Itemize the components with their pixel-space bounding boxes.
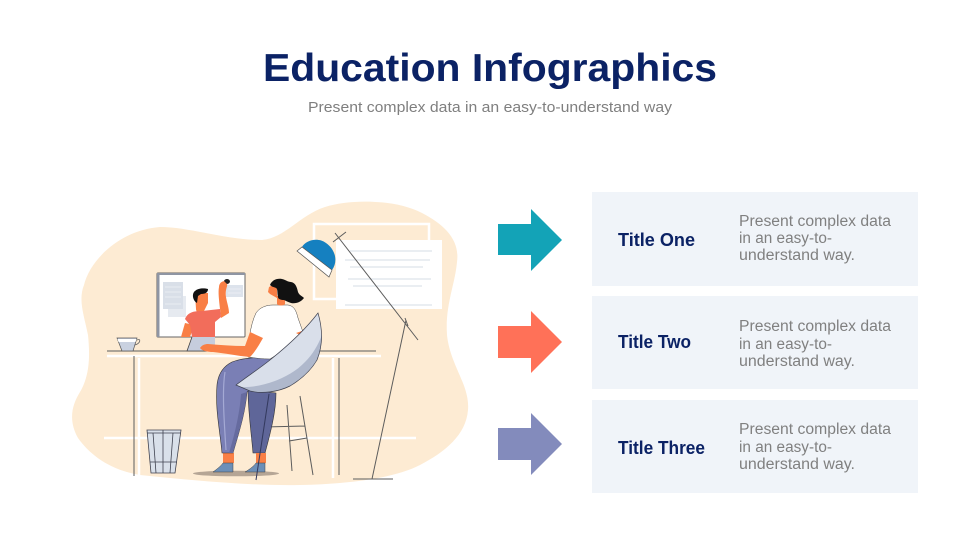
white shirt — [248, 305, 303, 359]
crescent chair — [236, 313, 322, 392]
illustration: person at desk on video call — [72, 202, 468, 485]
waste bin — [147, 430, 181, 473]
heading: title two: Title Two — [618, 332, 691, 352]
man raising arm — [181, 279, 230, 337]
wall note paper — [336, 240, 442, 309]
monitor with video call — [157, 273, 245, 337]
arm — [200, 332, 263, 357]
text: title two description: in an easy-to- — [739, 336, 832, 353]
floor lamp — [297, 232, 418, 479]
stool — [264, 396, 313, 475]
laptop — [187, 337, 218, 351]
subtitle: Present complex data in an easy-to-understand way — [308, 99, 673, 116]
wall picture frame — [314, 224, 429, 299]
face — [268, 283, 277, 298]
woman seated on chair — [200, 279, 304, 472]
background blob — [72, 202, 468, 485]
floor shadow — [193, 471, 279, 476]
text: title one description: Present complex data — [739, 213, 891, 230]
arrow: coral — [498, 311, 562, 373]
panel: title three — [592, 400, 918, 493]
text: title two description: understand way. — [739, 353, 855, 370]
title: Education Infographics — [263, 47, 717, 90]
neck — [277, 296, 285, 306]
panel: title one — [592, 192, 918, 286]
text: title one description: in an easy-to- — [739, 230, 832, 247]
arrow: periwinkle — [498, 413, 562, 475]
desk and floor lines — [104, 351, 416, 478]
socks — [223, 453, 266, 463]
text: title one description: understand way. — [739, 247, 855, 264]
heading: title three: Title Three — [618, 438, 705, 458]
back leg — [248, 390, 276, 453]
arrow: teal — [498, 209, 562, 271]
hair — [270, 279, 304, 303]
text: title three description: in an easy-to- — [739, 439, 832, 456]
text: title three description: understand way. — [739, 456, 855, 473]
text: title two description: Present complex data — [739, 318, 891, 335]
front leg — [217, 357, 272, 453]
hand on chair — [296, 331, 302, 336]
stool pole — [256, 394, 269, 480]
text: title three description: Present complex data — [739, 421, 891, 438]
panel: title two — [592, 296, 918, 389]
shoes — [213, 463, 265, 472]
heading: title one: Title One — [618, 230, 695, 250]
coffee cup — [117, 338, 140, 351]
